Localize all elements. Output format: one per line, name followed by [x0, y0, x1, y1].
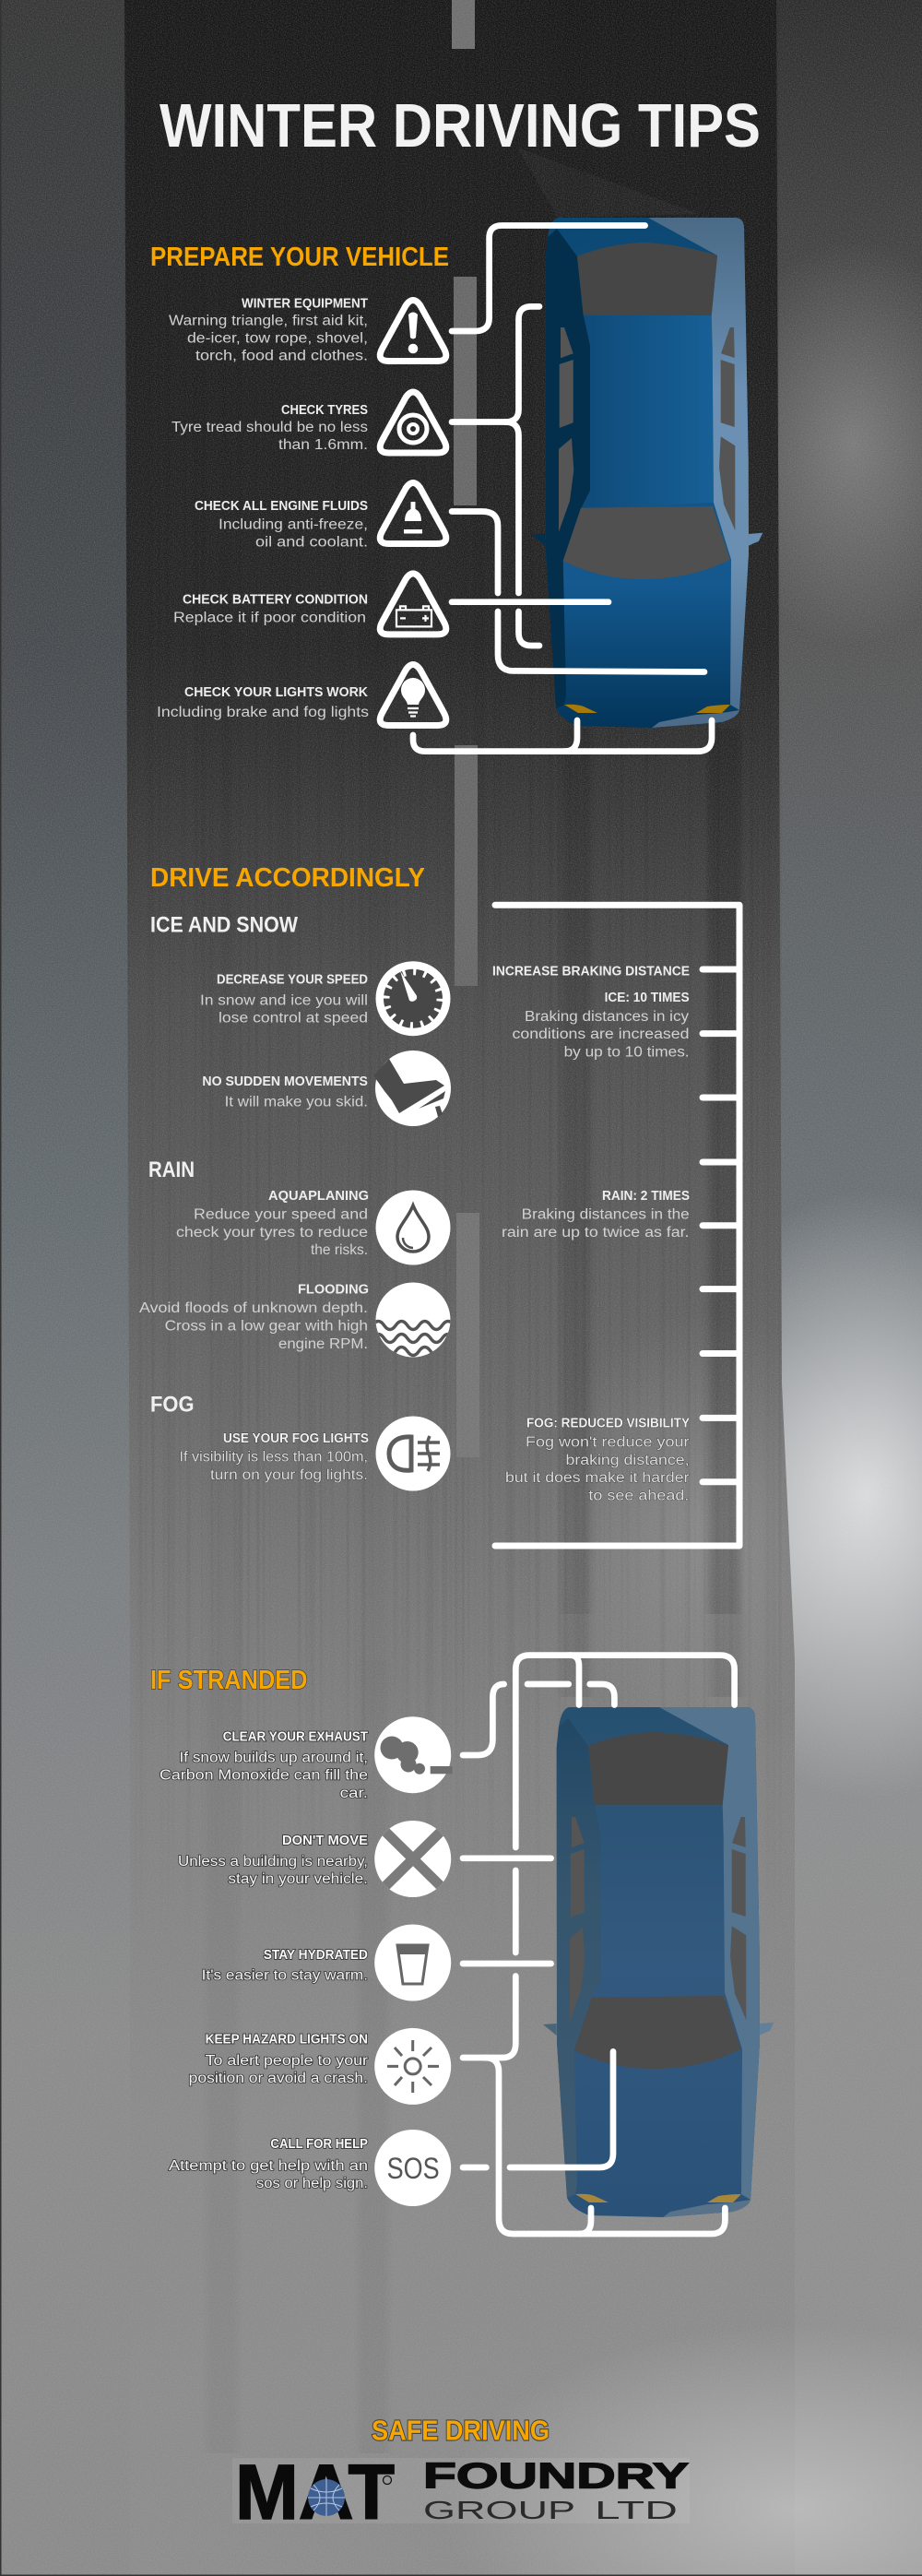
item: flooding: Avoid floods of unknown depth. — [139, 1300, 368, 1316]
icon: battery triangle — [380, 574, 446, 635]
logo: MAT Foundry Group: LTD — [595, 2496, 678, 2524]
item: decrease speed: DECREASE YOUR SPEED — [217, 972, 368, 987]
item: no sudden movements: It will make you skid. — [225, 1095, 368, 1110]
item: engine fluids: CHECK ALL ENGINE FLUIDS — [195, 499, 368, 514]
panel: drive accordingly — [139, 863, 739, 1546]
item: fog reduced visibility: braking distance, — [566, 1453, 690, 1468]
item: check tyres — [171, 403, 368, 453]
item: rain 2 times: Braking distances in the — [522, 1207, 690, 1223]
item: hazard lights: position or avoid a crash. — [189, 2071, 368, 2086]
item: ice 10 times: by up to 10 times. — [564, 1044, 690, 1061]
icon: warning triangle — [380, 301, 446, 362]
item: hazard lights: To alert people to your — [206, 2053, 368, 2069]
item: battery: CHECK BATTERY CONDITION — [183, 592, 368, 607]
item: hazard lights — [189, 2033, 368, 2086]
item: don't move: Unless a building is nearby, — [178, 1854, 368, 1870]
footer heading: safe driving: SAFE DRIVING — [372, 2415, 550, 2447]
item: fog reduced visibility: to see ahead. — [588, 1488, 689, 1503]
item: winter equipment: Warning triangle, first aid kit, — [169, 314, 368, 328]
item: battery: Replace it if poor condition — [173, 611, 366, 625]
item: winter equipment: torch, food and clothes. — [195, 348, 368, 363]
item: flooding: Cross in a low gear with high — [165, 1319, 368, 1334]
item: check tyres: than 1.6mm. — [278, 437, 368, 453]
logo: MAT Foundry Group: FOUNDRY — [423, 2457, 689, 2496]
item: rain 2 times: RAIN: 2 TIMES — [602, 1189, 690, 1204]
item: call for help — [169, 2137, 368, 2191]
item: decrease speed: In snow and ice you will — [200, 993, 368, 1009]
item: engine fluids — [195, 499, 368, 550]
icon: speedometer — [376, 961, 450, 1036]
item: check tyres: Tyre tread should be no less — [171, 420, 368, 435]
subheading: ice and snow: ICE AND SNOW — [150, 913, 298, 938]
item: winter equipment: de-icer, tow rope, shovel, — [187, 330, 368, 346]
item: fog lights: USE YOUR FOG LIGHTS — [223, 1431, 369, 1446]
icon: SOS — [374, 2130, 451, 2206]
panel: braking distance — [492, 905, 739, 1546]
heading: increase braking distance: INCREASE BRAKING DISTANCE — [492, 965, 690, 979]
car illustration: stranded — [543, 1707, 774, 2217]
icon: boot on pedal — [373, 1051, 451, 1126]
icon: cross — [374, 1821, 451, 1897]
item: rain 2 times: rain are up to twice as far. — [502, 1225, 690, 1241]
logo: MAT Foundry Group: GROUP — [423, 2496, 575, 2524]
panel: prepare your vehicle — [150, 243, 449, 725]
item: fog reduced visibility: but it does make it harder — [505, 1470, 690, 1486]
item: call for help: CALL FOR HELP — [270, 2137, 368, 2152]
item: aquaplaning — [176, 1189, 369, 1258]
icon: glass of water — [374, 1924, 451, 2001]
item: clear exhaust: Carbon Monoxide can fill the — [160, 1768, 368, 1784]
heading: drive accordingly: DRIVE ACCORDINGLY — [150, 863, 425, 893]
logo: MAT Foundry Group: MAT — [235, 2449, 395, 2535]
heading: if stranded: IF STRANDED — [150, 1666, 308, 1695]
panel: if stranded — [150, 1666, 453, 2206]
subheading: fog: FOG — [150, 1392, 194, 1417]
item: engine fluids: Including anti-freeze, — [219, 516, 368, 533]
item: clear exhaust — [160, 1730, 368, 1801]
item: aquaplaning: AQUAPLANING — [268, 1189, 369, 1204]
item: no sudden movements — [202, 1074, 368, 1110]
item: clear exhaust: car. — [340, 1786, 368, 1801]
item: clear exhaust: CLEAR YOUR EXHAUST — [223, 1730, 368, 1745]
item: flooding — [139, 1282, 369, 1352]
item: clear exhaust: If snow builds up around it, — [179, 1750, 368, 1765]
item: hazard lights: KEEP HAZARD LIGHTS ON — [206, 2033, 368, 2048]
item: ice 10 times: conditions are increased — [513, 1027, 690, 1042]
car illustration: top — [532, 218, 762, 728]
item: battery — [173, 592, 368, 625]
icon: bulb triangle — [380, 664, 446, 725]
connector lines: if stranded — [463, 1656, 735, 2234]
item: flooding: engine RPM. — [278, 1336, 368, 1352]
item: ice 10 times: ICE: 10 TIMES — [605, 991, 690, 1005]
icon: water drop — [376, 1190, 450, 1265]
item: call for help: Attempt to get help with an — [169, 2158, 368, 2174]
icon: hazard light — [374, 2028, 451, 2105]
item: aquaplaning: the risks. — [311, 1242, 368, 1258]
item: rain 2 times — [502, 1189, 690, 1241]
icon: tyre triangle — [380, 392, 446, 453]
item: fog lights: turn on your fog lights. — [210, 1467, 368, 1483]
item: fog reduced visibility: Fog won't reduce your — [526, 1434, 690, 1450]
item: stay hydrated: It's easier to stay warm. — [202, 1968, 368, 1983]
item: no sudden movements: NO SUDDEN MOVEMENTS — [202, 1074, 368, 1089]
item: aquaplaning: check your tyres to reduce — [176, 1225, 368, 1241]
item: flooding: FLOODING — [298, 1282, 369, 1297]
item: aquaplaning: Reduce your speed and — [194, 1207, 368, 1223]
item: fog lights: If visibility is less than 100m, — [179, 1450, 368, 1466]
item: ice 10 times: Braking distances in icy — [525, 1009, 689, 1025]
ladder bracket — [495, 905, 739, 1546]
item: lights: CHECK YOUR LIGHTS WORK — [184, 685, 369, 700]
item: lights — [157, 685, 369, 720]
item: ice 10 times — [513, 991, 690, 1061]
item: fog reduced visibility — [505, 1417, 690, 1503]
item: stay hydrated — [202, 1948, 368, 1983]
item: check tyres: CHECK TYRES — [281, 403, 368, 418]
item: don't move: DON'T MOVE — [282, 1834, 368, 1848]
item: fog lights — [179, 1431, 369, 1483]
icon: exhaust smoke — [374, 1716, 453, 1793]
subheading: rain: RAIN — [148, 1157, 195, 1182]
item: call for help: sos or help sign. — [256, 2176, 368, 2191]
item: lights: Including brake and fog lights — [157, 705, 369, 720]
item: don't move — [178, 1834, 368, 1887]
heading: prepare your vehicle: PREPARE YOUR VEHICLE — [150, 243, 449, 272]
title: WINTER DRIVING TIPS — [160, 91, 761, 160]
item: winter equipment — [169, 297, 368, 363]
connector lines: prepare your vehicle — [413, 225, 712, 752]
item: decrease speed: lose control at speed — [219, 1011, 368, 1027]
icon: flood waves — [372, 1282, 454, 1358]
item: decrease speed — [200, 972, 368, 1027]
item: winter equipment: WINTER EQUIPMENT — [242, 297, 368, 312]
item: fog reduced visibility: FOG: REDUCED VISIBILITY — [526, 1417, 690, 1431]
item: stay hydrated: STAY HYDRATED — [264, 1948, 368, 1963]
icon: fluid bottle triangle — [380, 483, 446, 544]
item: don't move: stay in your vehicle. — [228, 1871, 368, 1887]
item: engine fluids: oil and coolant. — [255, 534, 368, 550]
icon: fog light — [376, 1417, 450, 1490]
logo: MAT Foundry Group — [232, 2449, 690, 2535]
icon: SOS: SOS — [387, 2152, 440, 2185]
